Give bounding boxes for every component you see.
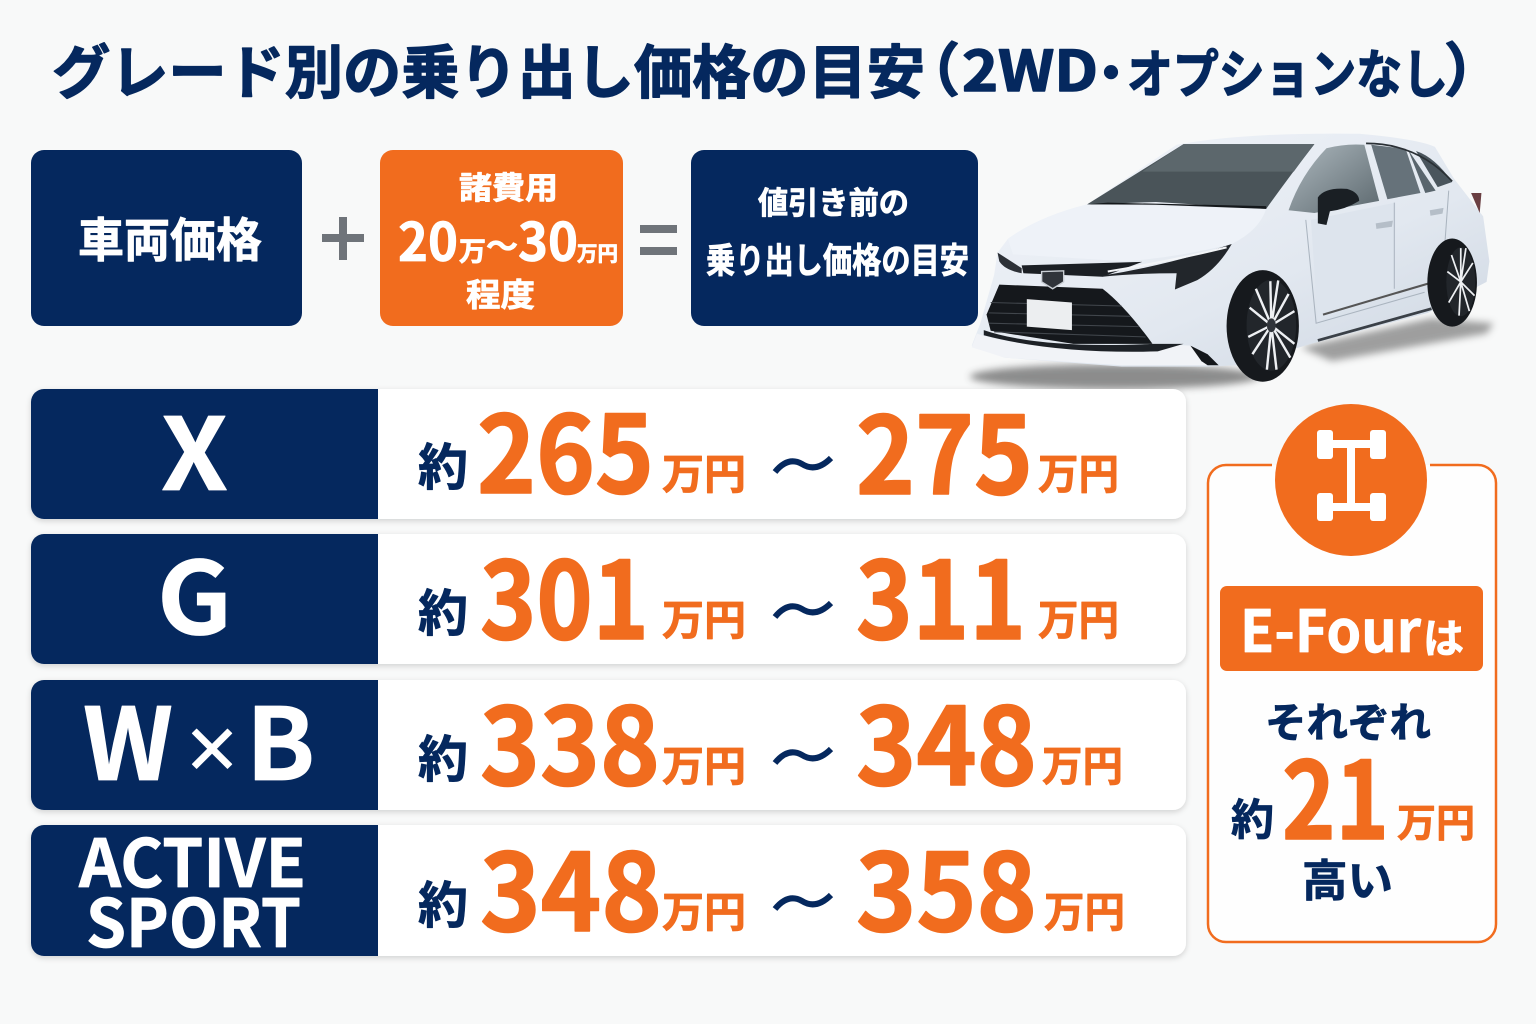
mirror bbox=[1318, 189, 1359, 225]
car body bbox=[972, 134, 1489, 367]
formula: result box: 値引き前の bbox=[758, 178, 909, 223]
formula: fees box: 万 bbox=[459, 230, 486, 269]
price row: X: 万円 bbox=[662, 441, 746, 502]
title: 2WD bbox=[962, 27, 1098, 108]
price row: X: 万円 bbox=[1038, 441, 1119, 502]
price row: G: 約 bbox=[418, 574, 468, 646]
price row: G bbox=[31, 515, 1186, 670]
formula: fees box bbox=[380, 150, 623, 326]
front grille bbox=[987, 285, 1153, 344]
title: ・ bbox=[1086, 34, 1136, 106]
price row: W×B: B bbox=[246, 664, 315, 809]
price row: G: 万円 bbox=[662, 587, 746, 648]
formula: fees box: ～ bbox=[486, 222, 518, 266]
price row: G: 311 bbox=[856, 515, 1026, 670]
price row: X: X bbox=[161, 374, 228, 519]
icon: drivetrain bbox=[1275, 404, 1427, 556]
door handles bbox=[1376, 208, 1444, 229]
formula: fees box: 30 bbox=[518, 201, 578, 277]
door lines bbox=[1306, 191, 1449, 323]
price row: W×B: 348 bbox=[856, 661, 1037, 816]
callout text: それぞれ bbox=[1265, 689, 1431, 749]
price row: ACTIVE SPORT: SPORT bbox=[86, 871, 301, 967]
price row: X: 約 bbox=[418, 428, 468, 500]
title: （ bbox=[902, 24, 960, 108]
formula: fees box: 諸費用 bbox=[459, 163, 558, 208]
title bbox=[52, 24, 1502, 110]
E-Four label: は bbox=[1423, 605, 1464, 665]
price row: W×B: × bbox=[182, 703, 242, 790]
price row: W×B: 約 bbox=[418, 720, 468, 792]
title: グレード別の乗り出し価格の目安 bbox=[52, 26, 925, 110]
price row: X: 275 bbox=[856, 370, 1033, 525]
formula: fees box: 程度 bbox=[466, 270, 535, 316]
price row: G: 301 bbox=[480, 515, 649, 670]
upper grille and emblem bbox=[1022, 262, 1142, 277]
formula: vehicle price box bbox=[31, 150, 302, 326]
price row: ACTIVE SPORT bbox=[31, 807, 1186, 967]
formula: vehicle price box: 車両価格 bbox=[78, 202, 262, 271]
panel: E-Four callout: 高い bbox=[1302, 845, 1393, 909]
plus sign bbox=[322, 217, 364, 260]
headlight left bbox=[998, 253, 1022, 273]
formula: result box: 乗り出し価格の目安 bbox=[706, 233, 969, 284]
title: ） bbox=[1444, 24, 1502, 108]
rear wheel bbox=[1427, 238, 1477, 327]
front wheel bbox=[1227, 270, 1299, 382]
formula: fees box: 20 bbox=[398, 201, 458, 277]
headlight right bbox=[1103, 244, 1232, 289]
car illustration bbox=[970, 134, 1493, 389]
price row: ACTIVE SPORT: 万円 bbox=[662, 879, 746, 940]
price row: ACTIVE SPORT: 358 bbox=[856, 807, 1037, 962]
panel: E-Four callout: 21 bbox=[1282, 715, 1389, 870]
price row: G: G bbox=[157, 518, 232, 663]
windshield bbox=[1087, 144, 1314, 209]
title: オプションなし bbox=[1127, 33, 1448, 108]
price row: ACTIVE SPORT: ACTIVE bbox=[78, 811, 306, 907]
price row: W×B: 万円 bbox=[662, 733, 746, 794]
price row: ACTIVE SPORT: 万円 bbox=[1044, 879, 1125, 940]
side windows bbox=[1289, 144, 1379, 213]
tail light bbox=[1471, 193, 1481, 213]
panel: E-Four callout bbox=[1208, 404, 1496, 942]
price row: ACTIVE SPORT: 348 bbox=[480, 807, 662, 962]
panel: E-Four callout: 約 bbox=[1231, 786, 1274, 848]
price row: ACTIVE SPORT: 約 bbox=[418, 866, 468, 938]
price row: W×B bbox=[31, 661, 1186, 816]
equals sign bbox=[640, 225, 677, 255]
license plate bbox=[1027, 299, 1072, 330]
E-Four label: E-Four bbox=[1240, 585, 1422, 669]
price row: W×B: 万円 bbox=[1042, 733, 1123, 794]
price row: X: 265 bbox=[477, 369, 654, 524]
price row: W×B: W bbox=[83, 664, 173, 809]
price row: X bbox=[31, 369, 1186, 525]
lower lip bbox=[972, 334, 1208, 365]
formula: fees box: 万円 bbox=[577, 238, 618, 268]
panel: E-Four callout: 万円 bbox=[1397, 793, 1475, 849]
formula: result box bbox=[691, 150, 978, 326]
price row: G: 万円 bbox=[1038, 587, 1119, 648]
price row: W×B: 338 bbox=[480, 661, 660, 816]
